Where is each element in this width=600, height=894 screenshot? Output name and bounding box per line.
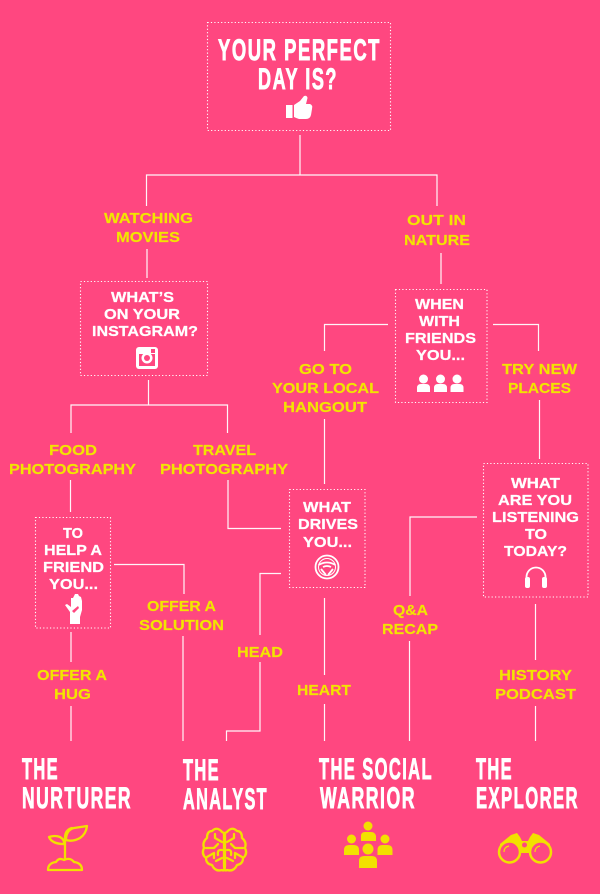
result heading: WARRIOR [320,782,416,815]
label: offer a hug [37,668,107,703]
result heading [183,754,268,816]
icon: steering wheel [316,556,338,578]
icon: instagram [136,347,158,369]
panel: helping a friend question [36,518,110,628]
icon: group of people [344,822,392,868]
panel: the nurturer [22,753,132,870]
arrow: friends to local hangout [324,324,388,351]
label: try new places [502,362,577,397]
panel: the analyst [183,754,268,870]
question text: WITH [419,314,460,330]
question text: DRIVES [298,517,358,533]
panel: title box [208,22,390,130]
icon: thumbs up [286,96,312,119]
arrow: listening to history podcast [534,604,536,660]
label: go to your local hangout: YOUR LOCAL [272,381,379,397]
title: YOUR PERFECT [218,34,381,67]
icon: brain [203,829,246,870]
label: food photography [9,443,136,478]
label: go to your local hangout: HANGOUT [283,400,367,416]
label: food photography: PHOTOGRAPHY [9,462,136,478]
panel: instagram question [80,282,208,376]
arrow: solution to analyst [182,636,184,741]
arrow: nature to friends [440,253,442,284]
result heading [22,753,132,815]
arrow: food to helping a friend [70,480,72,512]
icon: three people [417,374,464,392]
question text: WHAT’S [111,290,174,306]
arrow: movies to instagram [146,249,148,278]
label: try new places: TRY NEW [502,362,577,378]
question text: TO [525,527,547,543]
label: offer a solution [139,599,224,634]
question text: YOU... [49,577,98,593]
question text [405,297,476,364]
result heading: THE [476,753,513,786]
label: watching movies: WATCHING [104,211,193,227]
arrow: drives to heart [324,598,326,675]
arrow: hug to nurturer [70,706,72,741]
question text: FRIEND [43,560,104,576]
label: q&a recap: Q&A [393,603,428,619]
question text: WHAT [303,500,351,516]
panel: listening question [484,464,588,597]
question text: HELP A [44,543,102,559]
arrow: title to first choices [146,135,437,206]
label: history podcast: PODCAST [495,687,576,703]
label: go to your local hangout: GO TO [299,362,352,378]
result heading [319,753,433,815]
arrow: friend to offer a solution [114,564,184,594]
question text: TO [63,526,83,542]
question text: WHEN [415,297,464,313]
label: go to your local hangout [272,362,379,416]
label: q&a recap [382,603,438,638]
result heading: NURTURER [22,782,132,815]
label: watching movies: MOVIES [116,230,180,246]
question text: ON YOUR [104,307,180,323]
label: watching movies [104,211,193,246]
arrow: head to analyst [226,662,260,741]
title [218,34,381,96]
label: out in nature [404,213,470,249]
result heading: THE SOCIAL [319,753,433,786]
result heading: ANALYST [183,783,268,816]
icon: helping hands [65,594,82,624]
arrow: drives to head [260,574,281,635]
label: q&a recap: RECAP [382,622,438,638]
question text [298,500,358,551]
label: offer a solution: OFFER A [147,599,216,615]
arrow: heart to social warrior [324,704,326,741]
label: history podcast: HISTORY [499,668,572,684]
arrow: friends to new places [493,324,538,351]
label: offer a hug: HUG [54,687,91,703]
label: offer a hug: OFFER A [37,668,107,684]
question text: INSTAGRAM? [92,324,198,340]
result heading: THE [22,753,59,786]
question text: TODAY? [504,544,567,560]
arrow: travel to what drives you [228,480,281,528]
result heading [476,753,579,815]
icon: binoculars [499,833,551,862]
label: offer a solution: SOLUTION [139,618,224,634]
arrow: podcast to explorer [534,706,536,741]
label: heart: HEART [297,683,351,699]
question text [92,290,198,340]
title: DAY IS? [258,63,338,96]
question text: WHAT [511,476,560,492]
label: try new places: PLACES [508,381,571,397]
question text [492,476,579,560]
panel: friends question [396,290,487,402]
arrow: recap to explorer path [408,641,410,741]
arrow: instagram to photography choices [71,380,228,433]
question text: YOU... [416,348,465,364]
arrow: friend to offer a hug [70,632,72,662]
label: travel photography: PHOTOGRAPHY [160,462,288,478]
arrow: listening to q&a recap [410,517,477,596]
question text: FRIENDS [405,331,476,347]
question text: YOU... [303,535,352,551]
label: head: HEAD [237,645,283,661]
arrow: hangout to what drives you [324,419,326,484]
label: food photography: FOOD [49,443,97,459]
label: travel photography: TRAVEL [193,443,256,459]
question text: LISTENING [492,510,579,526]
label: out in nature: OUT IN [407,213,466,229]
panel: what drives you question [290,490,365,588]
icon: sprout [48,826,87,870]
question text: ARE YOU [498,493,572,509]
panel: the social warrior [319,753,433,868]
question text [43,526,104,593]
arrow: new places to listening [538,400,540,459]
label: out in nature: NATURE [404,233,470,249]
label: history podcast [495,668,576,703]
icon: headphones [525,568,547,588]
label: travel photography [160,443,288,478]
panel: the explorer [476,753,579,862]
result heading: THE [183,754,220,787]
